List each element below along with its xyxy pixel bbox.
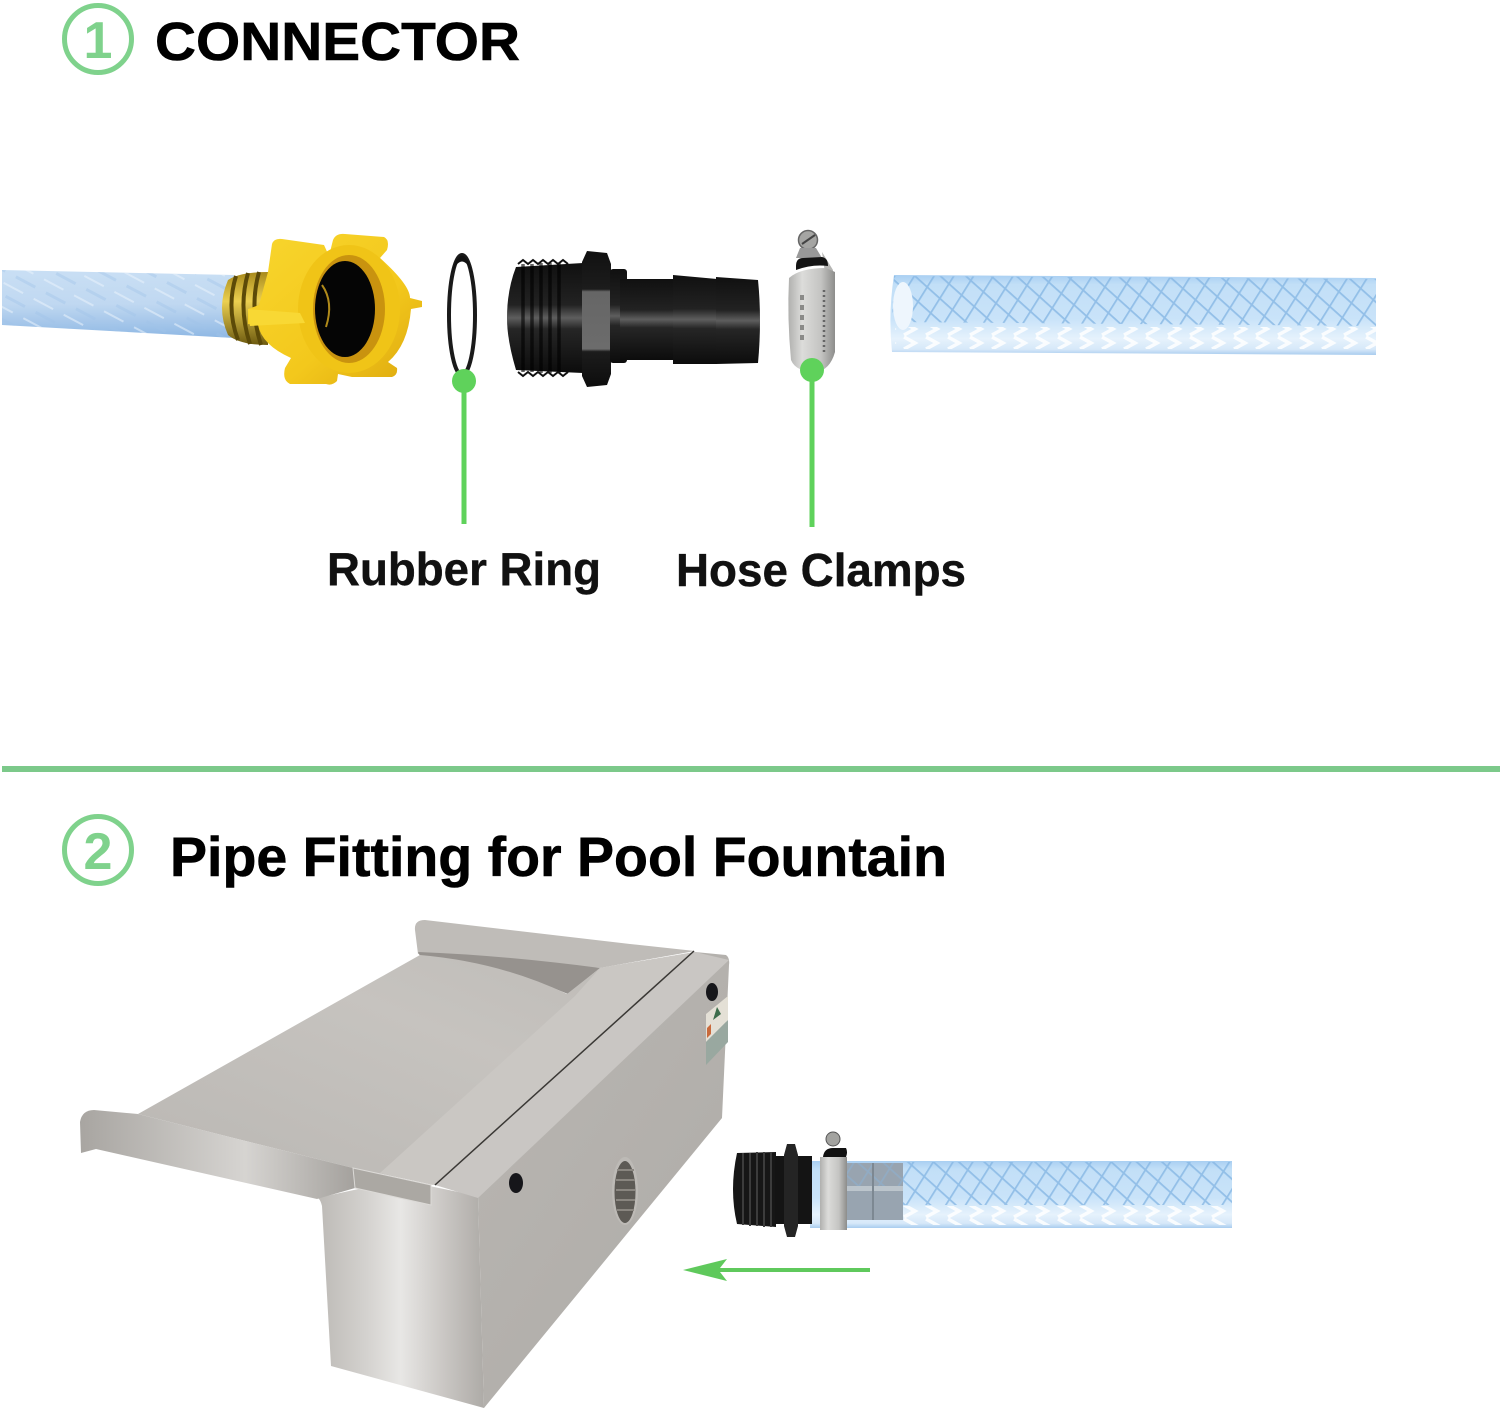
barb body bbox=[610, 269, 760, 364]
hose bbox=[810, 1161, 1232, 1228]
threaded inlet hole bbox=[612, 1157, 638, 1225]
front curved lip bbox=[80, 1110, 355, 1199]
leader line and dot bbox=[452, 369, 476, 524]
illustration: stainless pool fountain spillway bbox=[80, 920, 729, 1408]
leader line and dot bbox=[800, 358, 824, 527]
part: black threaded barb connector bbox=[507, 251, 760, 387]
sticker label bbox=[706, 996, 728, 1065]
hose section bbox=[2, 270, 234, 338]
illustration: blue hose with yellow swivel nut bbox=[2, 234, 422, 385]
neck bbox=[775, 1156, 812, 1224]
top plate with back curved lip bbox=[138, 920, 695, 1185]
badge: number 1 bbox=[64, 6, 132, 72]
label: Rubber Ring: Rubber Ring bbox=[327, 543, 601, 595]
end strap bbox=[353, 1168, 431, 1205]
part: stainless hose clamp bbox=[788, 230, 835, 372]
hose: clear braided tube bbox=[890, 275, 1376, 355]
bolt bbox=[706, 983, 718, 1001]
part: rubber ring bbox=[449, 255, 475, 375]
badge: number 2: 2 bbox=[84, 823, 112, 881]
front face bbox=[317, 1180, 484, 1408]
bolt bbox=[509, 1173, 523, 1193]
badge: number 1: 1 bbox=[84, 12, 112, 70]
clamp bbox=[820, 1132, 847, 1230]
arrow: insert direction bbox=[683, 1259, 870, 1281]
callout: rubber ring bbox=[327, 369, 601, 595]
side face bbox=[435, 952, 729, 1408]
heading: step 1 connector bbox=[64, 6, 520, 72]
inserted barb seen through hose bbox=[845, 1163, 903, 1220]
yellow nut bbox=[248, 234, 422, 385]
title: Pipe Fitting for Pool Fountain: Pipe Fitting for Pool Fountain bbox=[170, 825, 947, 888]
label: Hose Clamps: Hose Clamps bbox=[676, 544, 966, 596]
hex flange bbox=[582, 251, 611, 387]
threaded end bbox=[733, 1152, 776, 1227]
heading: step 2 pipe fitting bbox=[64, 816, 947, 888]
brass hose thread bbox=[222, 272, 268, 345]
title: CONNECTOR: CONNECTOR bbox=[155, 12, 520, 72]
side bend highlight bbox=[435, 952, 729, 1198]
callout: hose clamps bbox=[676, 358, 966, 596]
badge: number 2 bbox=[64, 816, 132, 884]
hex flange bbox=[784, 1144, 798, 1237]
illustration: assembled connector in hose bbox=[733, 1132, 1232, 1237]
threaded end bbox=[507, 260, 583, 376]
